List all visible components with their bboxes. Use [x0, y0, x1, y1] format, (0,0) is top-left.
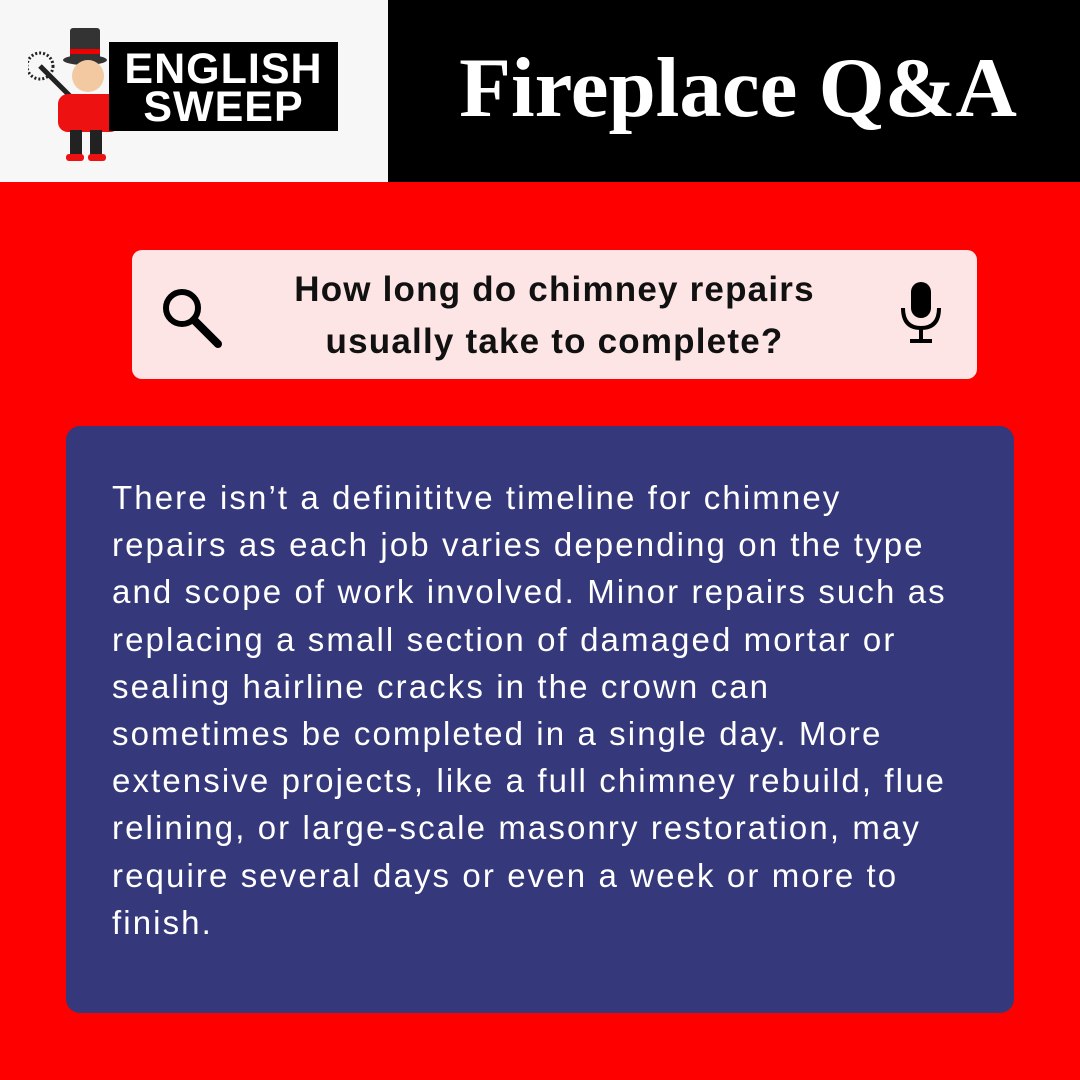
answer text: sometimes be completed in a single day. More: [112, 715, 882, 752]
answer text: replacing a small section of damaged mortar or: [112, 621, 896, 658]
question text: [294, 270, 815, 361]
header: title: Fireplace Q&A: [459, 41, 1017, 135]
answer text: extensive projects, like a full chimney rebuild, flue: [112, 762, 946, 799]
logo wordmark: ENGLISH: [124, 45, 323, 93]
answer text: sealing hairline cracks in the crown can: [112, 668, 770, 705]
answer text: require several days or even a week or more to: [112, 857, 898, 894]
icon: microphone: [901, 282, 941, 343]
logo wordmark: SWEEP: [143, 83, 304, 131]
question text: How long do chimney repairs: [294, 270, 815, 309]
question text: usually take to complete?: [326, 322, 783, 361]
header: title: [388, 0, 1080, 182]
answer text: repairs as each job varies depending on the type: [112, 526, 925, 563]
logo panel: [0, 0, 388, 182]
answer text: [112, 479, 947, 941]
answer text: finish.: [112, 904, 213, 941]
search bar question: [132, 250, 977, 379]
logo wordmark: [109, 42, 338, 131]
answer panel: [66, 426, 1014, 1013]
icon: magnifier: [163, 289, 222, 348]
answer text: There isn’t a definititve timeline for chimney: [112, 479, 841, 516]
answer text: and scope of work involved. Minor repairs such as: [112, 573, 947, 610]
answer text: relining, or large-scale masonry restoration, may: [112, 809, 921, 846]
icon: sweep mascot: [28, 28, 114, 161]
